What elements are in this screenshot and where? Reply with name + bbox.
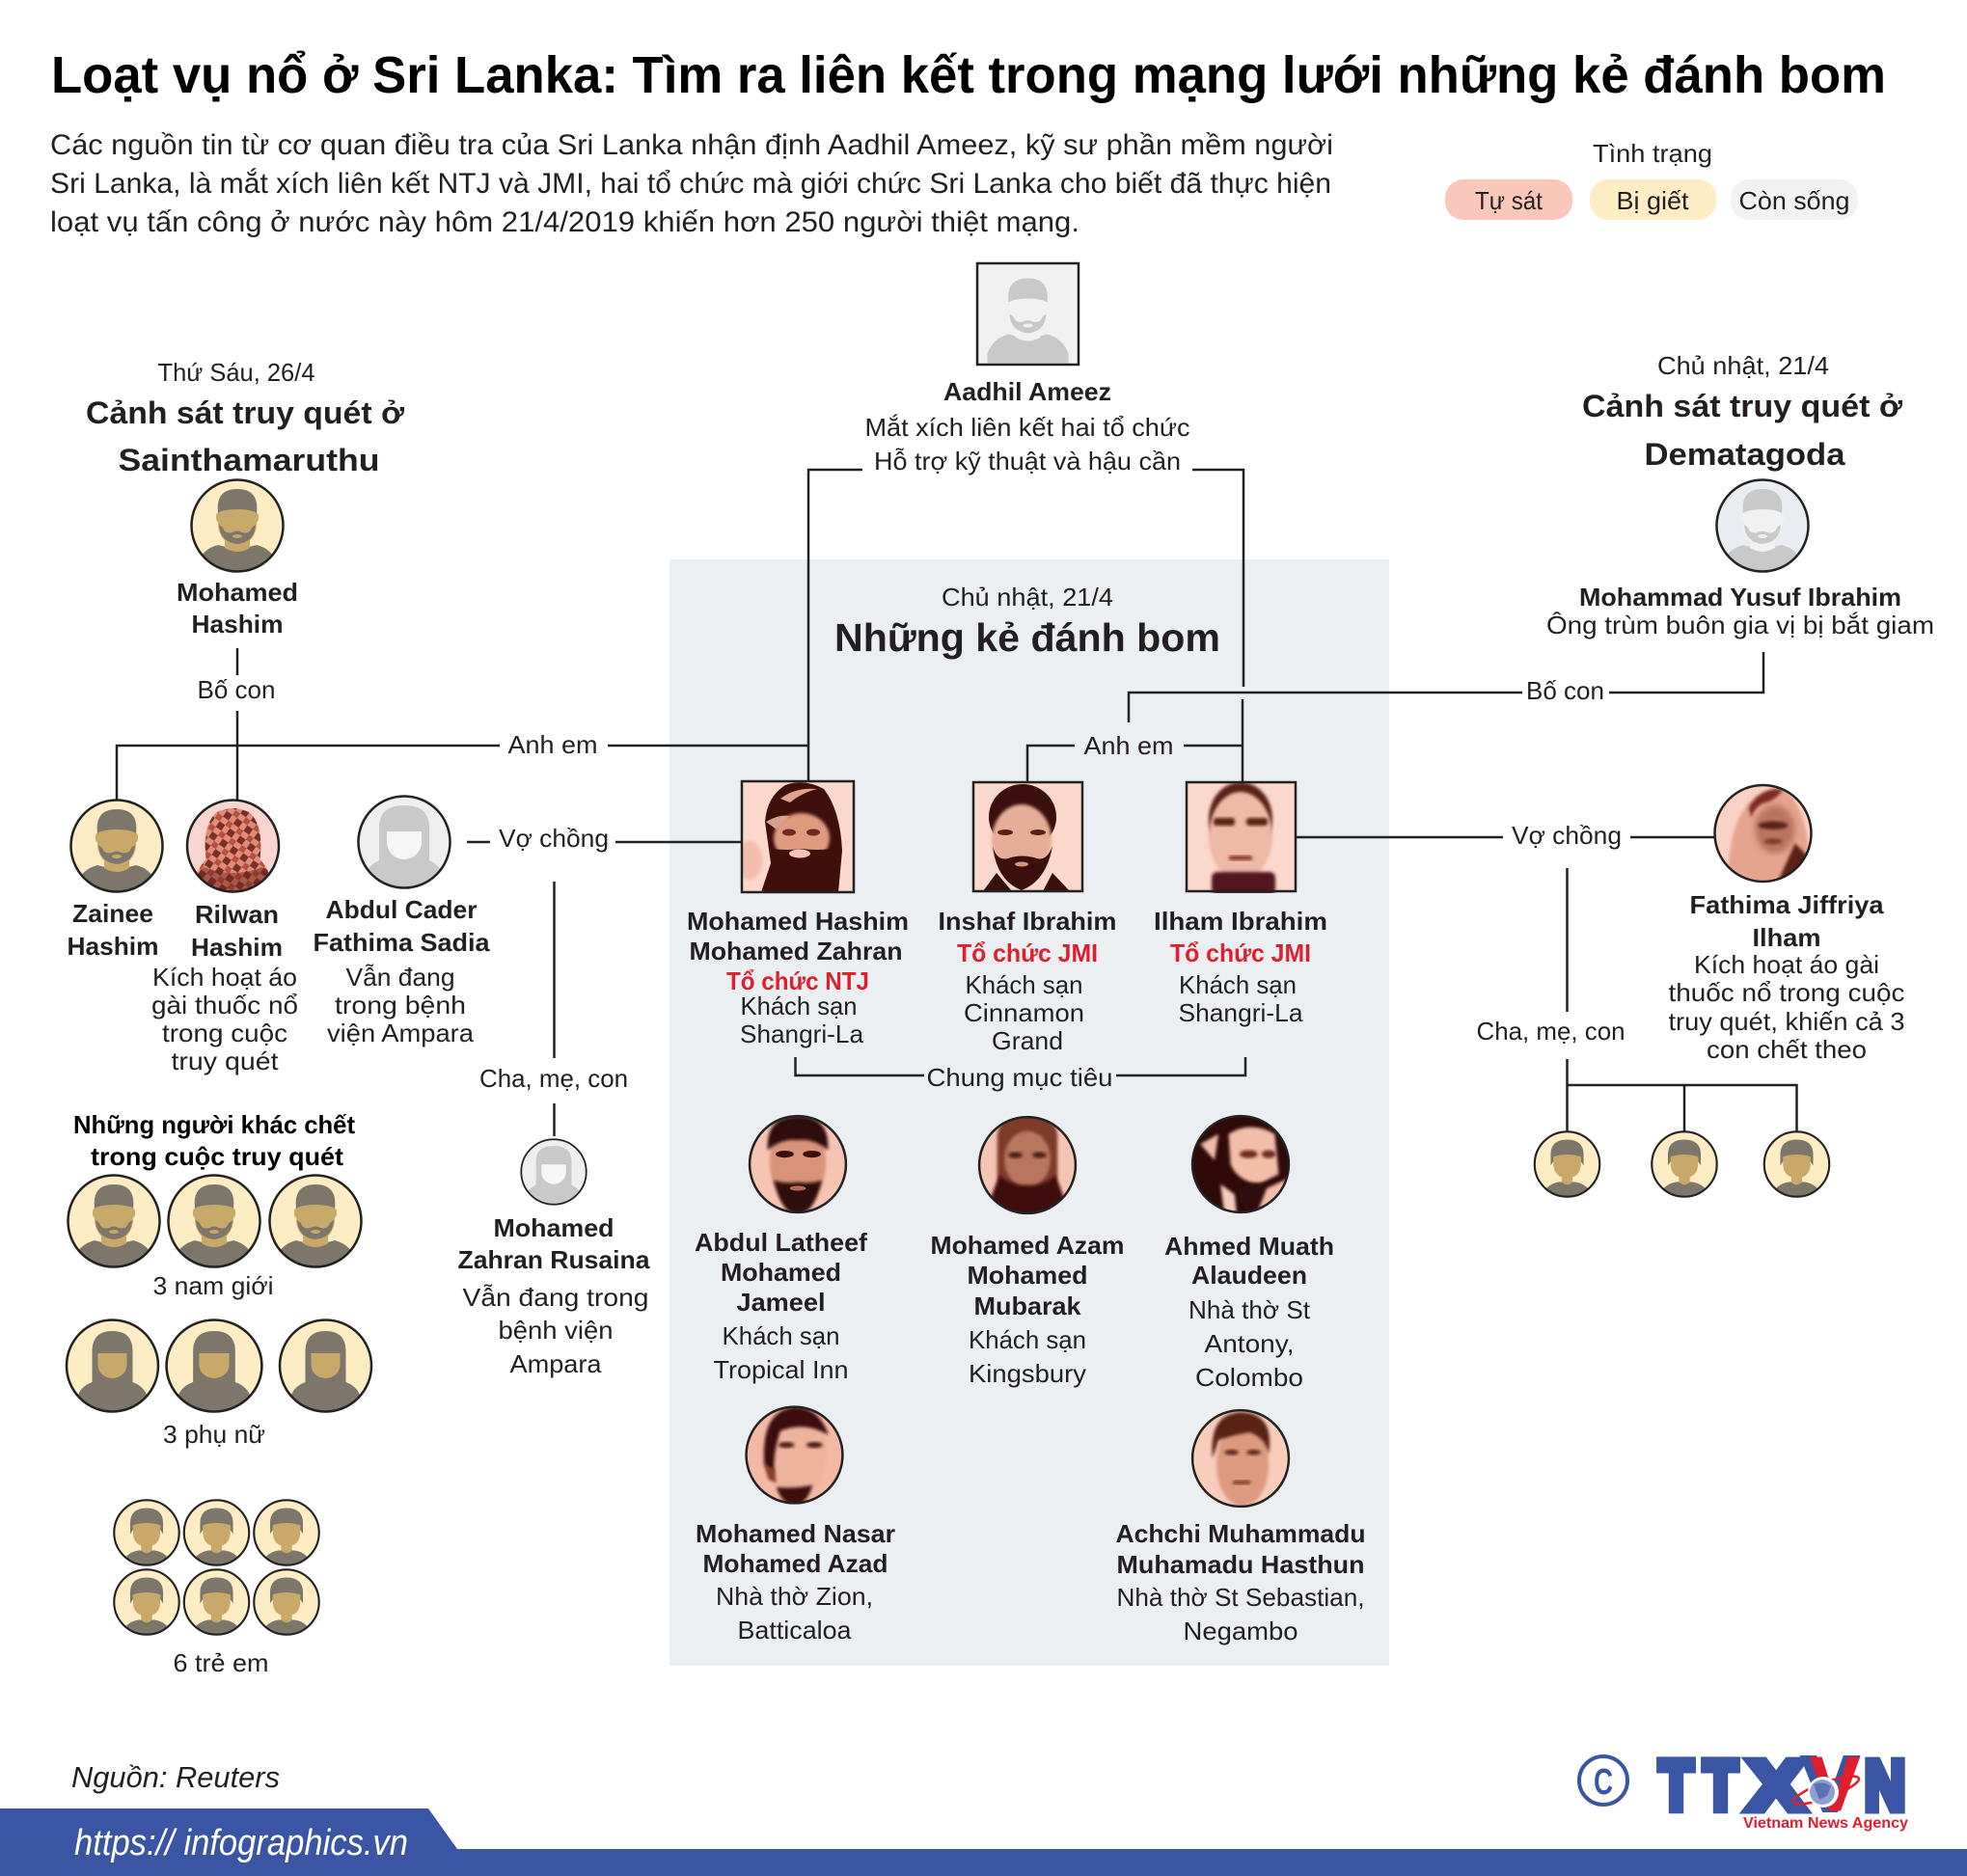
panel: bombers background (669, 559, 1389, 1666)
target: Grand (992, 1026, 1063, 1055)
portrait: scarf (187, 801, 279, 894)
intro text: Các nguồn tin từ cơ quan điều tra của Sri Lanka nhận định Aadhil Ameez, kỹ sư phần mềm người (50, 129, 1333, 161)
icon: man killed (191, 480, 284, 574)
name: Zainee (72, 899, 153, 928)
name (191, 900, 283, 962)
heading: Sainthamaruthu raid: Cảnh sát truy quét ở (86, 395, 404, 430)
target (969, 1325, 1086, 1388)
wordmark: X (1748, 1748, 1804, 1825)
photo (737, 781, 854, 892)
name (695, 1228, 867, 1317)
name (313, 895, 490, 957)
icon: girl alive (521, 1139, 587, 1206)
name: Inshaf Ibrahim (938, 907, 1117, 936)
heading: Sainthamaruthu raid: Thứ Sáu, 26/4 (158, 358, 314, 387)
target (964, 970, 1084, 1055)
intro text: loạt vụ tấn công ở nước này hôm 21/4/2019 khiến hơn 250 người thiệt mạng. (50, 206, 1079, 238)
wordmark (1659, 1741, 1905, 1827)
person: Rilwan Hashim (151, 801, 298, 1075)
person: Mohamed Zahran Rusaina (457, 1139, 650, 1378)
footer bar (0, 1808, 1967, 1876)
heading: Dematagoda raid: Dematagoda (1644, 437, 1845, 472)
name: Ilham (1752, 923, 1821, 952)
target: Cinnamon (964, 998, 1084, 1027)
description: Kích hoạt áo gài (1694, 950, 1879, 979)
description: truy quét (172, 1047, 279, 1075)
title: Loạt vụ nổ ở Sri Lanka: Tìm ra liên kết trong mạng lưới những kẻ đánh bom (51, 46, 1886, 104)
description: gài thuốc nổ (151, 991, 298, 1020)
target: Batticaloa (737, 1616, 852, 1645)
target (1117, 1583, 1364, 1645)
connector lines (117, 470, 1796, 1136)
panel: others killed in raid (67, 1110, 371, 1677)
wordmark: T (1704, 1748, 1737, 1825)
legend pill: alive: Còn sống (1738, 186, 1850, 215)
target: Negambo (1183, 1617, 1298, 1645)
name: Mohamed (177, 578, 298, 607)
description: Kích hoạt áo (152, 963, 297, 992)
intro text: Sri Lanka, là mắt xích liên kết NTJ và JMI, hai tổ chức mà giới chức Sri Lanka cho biết đã thực hiện (50, 168, 1331, 200)
wordmark: N (1865, 1748, 1905, 1825)
name: Mohamed Zahran (689, 937, 903, 965)
relation labels: Vợ chồng (499, 824, 609, 853)
icons: Fathima's 3 children (1535, 1131, 1829, 1198)
name: Fathima Jiffriya (1690, 890, 1884, 919)
name: Abdul Cader (326, 895, 477, 924)
legend pill: alive (1731, 179, 1858, 220)
name: Ilham Ibrahim (1154, 907, 1327, 936)
person: Ahmed Muath Alaudeen (1164, 1116, 1334, 1392)
name: Fathima Sadia (313, 928, 490, 957)
organisation: Tổ chức NTJ (726, 966, 869, 995)
description: thuốc nổ trong cuộc (1669, 978, 1904, 1007)
target (716, 1582, 873, 1645)
name: Mubarak (974, 1291, 1081, 1320)
legend pill: suicide: Tự sát (1475, 186, 1544, 215)
name and role: Aadhil Ameez (943, 377, 1111, 406)
description: Vẫn đang (345, 963, 455, 992)
heading: Sainthamaruthu raid (86, 358, 404, 477)
person: Mohamed Hashim (177, 480, 298, 639)
source: Nguồn: Reuters (71, 1760, 280, 1794)
heading: bombers: Chủ nhật, 21/4 (942, 583, 1113, 612)
photo (973, 782, 1082, 891)
name: Achchi Muhammadu (1115, 1519, 1366, 1548)
photo (747, 1407, 842, 1505)
icon: man killed (71, 801, 162, 894)
relation labels: Anh em (1084, 731, 1173, 760)
target: Nhà thờ Zion, (716, 1582, 873, 1611)
name and role: Ông trùm buôn gia vị bị bắt giam (1546, 611, 1934, 639)
icons: 3 women (67, 1319, 371, 1414)
name and role: Mắt xích liên kết hai tổ chức (864, 413, 1190, 442)
target (1179, 970, 1303, 1027)
footer url: https:// infographics.vn (74, 1823, 408, 1863)
heading: Những người khác chết (73, 1110, 355, 1139)
name: Hashim (68, 932, 158, 961)
person: Mohammad Yusuf Ibrahim (1546, 480, 1934, 639)
name (930, 1231, 1125, 1320)
person: Ilham Ibrahim (1154, 782, 1327, 1027)
heading: Dematagoda raid: Chủ nhật, 21/4 (1657, 351, 1829, 380)
name: Rilwan (195, 900, 279, 929)
name: Alaudeen (1191, 1261, 1307, 1290)
description (327, 963, 475, 1047)
name: Mohamed Azam (930, 1231, 1125, 1260)
copyright mark (1579, 1756, 1627, 1805)
organisation: Tổ chức JMI (1170, 938, 1311, 967)
photo (1192, 1410, 1289, 1507)
relation labels: Cha, mẹ, con (479, 1064, 628, 1093)
photo (1187, 782, 1296, 895)
person: Mohamed Hashim Mohamed Zahran (687, 781, 909, 1048)
photo (979, 1115, 1076, 1215)
description: trong cuộc (162, 1019, 287, 1047)
wordmark: T (1659, 1748, 1693, 1825)
name (177, 578, 298, 639)
name: Mohamed (721, 1258, 841, 1287)
person: Aadhil Ameez (864, 263, 1190, 476)
globe (1790, 1771, 1862, 1809)
person: Mohamed Azam Mohamed Mubarak (930, 1115, 1125, 1388)
icons: 6 children (114, 1500, 319, 1636)
target (714, 1321, 849, 1384)
name (457, 1213, 650, 1274)
name: Zahran Rusaina (457, 1245, 650, 1274)
wordmark: V (1802, 1741, 1858, 1827)
caption: 6 children: 6 trẻ em (174, 1648, 268, 1677)
photo (1192, 1116, 1289, 1214)
name: Hashim (191, 933, 283, 962)
photo (750, 1116, 846, 1214)
relation labels (197, 675, 1625, 1093)
name: Mohamed Hashim (687, 907, 909, 936)
description: Vẫn đang trong (463, 1283, 648, 1312)
legend pill: killed: Bị giết (1617, 186, 1689, 215)
relation labels: Chung mục tiêu (926, 1063, 1113, 1092)
name: Mohamed Nasar (696, 1519, 895, 1548)
name (1115, 1519, 1366, 1579)
copyright mark: C (1594, 1762, 1613, 1803)
name: Ahmed Muath (1164, 1232, 1334, 1261)
name and role (864, 377, 1190, 476)
target: Kingsbury (969, 1359, 1086, 1388)
target: Khách sạn (1179, 970, 1297, 999)
legend: status (1445, 139, 1858, 220)
name and role (1546, 583, 1934, 639)
target: Nhà thờ St (1188, 1295, 1311, 1324)
name (696, 1519, 895, 1578)
target (740, 992, 864, 1048)
description (1669, 950, 1904, 1064)
relation labels: Bố con (197, 675, 276, 704)
target: Shangri-La (1179, 998, 1303, 1027)
relation labels: Anh em (507, 730, 598, 759)
legend: status: Tình trạng (1593, 139, 1712, 168)
tagline: Vietnam News Agency (1743, 1815, 1908, 1832)
photo (1715, 785, 1812, 884)
name: Mohamed (967, 1261, 1088, 1290)
icons: 3 men (68, 1175, 361, 1269)
name and role: Mohammad Yusuf Ibrahim (1579, 583, 1901, 612)
target: Khách sạn (969, 1325, 1086, 1354)
portrait box (977, 263, 1079, 365)
caption: 3 men: 3 nam giới (152, 1271, 274, 1300)
intro text (50, 129, 1333, 238)
person: Mohamed Nasar Mohamed Azad (696, 1407, 895, 1645)
target: Khách sạn (965, 970, 1082, 999)
legend pill: suicide (1445, 179, 1572, 220)
name (1690, 890, 1884, 952)
heading: Dematagoda raid (1582, 351, 1902, 472)
target (1188, 1295, 1311, 1392)
icon: woman alive (359, 797, 450, 890)
heading: Sainthamaruthu raid: Sainthamaruthu (118, 443, 380, 477)
heading: bombers: Những kẻ đánh bom (834, 615, 1220, 660)
name: Muhamadu Hasthun (1117, 1550, 1364, 1579)
description (463, 1283, 648, 1378)
relation labels: Bố con (1526, 676, 1604, 705)
name (687, 907, 909, 965)
name: Abdul Latheef (695, 1228, 867, 1257)
legend pill: killed (1590, 179, 1716, 220)
person: Fathima Jiffriya Ilham (1669, 785, 1904, 1064)
name (1164, 1232, 1334, 1290)
person: Abdul Cader Fathima Sadia (313, 797, 490, 1047)
description: trong bệnh (335, 991, 466, 1020)
target: Shangri-La (740, 1020, 864, 1048)
heading: bombers (834, 583, 1220, 660)
heading: trong cuộc truy quét (91, 1142, 343, 1171)
relation labels: Cha, mẹ, con (1476, 1017, 1625, 1046)
relation labels: Vợ chồng (1512, 821, 1622, 850)
organisation: Tổ chức JMI (957, 938, 1098, 967)
name and role: Hỗ trợ kỹ thuật và hậu cần (874, 447, 1181, 476)
heading (73, 1110, 355, 1171)
description: viện Ampara (327, 1019, 475, 1047)
description: bệnh viện (498, 1316, 614, 1345)
target: Tropical Inn (714, 1355, 849, 1384)
name: Jameel (737, 1288, 826, 1317)
target: Colombo (1195, 1363, 1303, 1392)
description: con chết theo (1707, 1035, 1867, 1064)
target: Khách sạn (741, 992, 857, 1020)
description: Ampara (509, 1349, 602, 1378)
name: Mohamed (494, 1213, 614, 1242)
target: Nhà thờ St Sebastian, (1117, 1583, 1364, 1612)
target: Khách sạn (722, 1321, 839, 1350)
name: Hashim (191, 610, 284, 639)
person: Abdul Latheef Mohamed Jameel (695, 1116, 867, 1384)
target: Antony, (1204, 1329, 1295, 1358)
wordmark: V (1810, 1741, 1860, 1827)
name (68, 899, 158, 961)
person: Zainee Hashim (68, 801, 162, 961)
icon: man alive (1717, 480, 1808, 574)
name: Mohamed Azad (702, 1549, 888, 1578)
description: truy quét, khiến cả 3 (1669, 1007, 1904, 1036)
heading: Dematagoda raid: Cảnh sát truy quét ở (1582, 389, 1902, 423)
logo: TTXVN (1579, 1741, 1908, 1832)
person: Inshaf Ibrahim (938, 782, 1117, 1055)
person: Achchi Muhammadu Muhamadu Hasthun (1115, 1410, 1366, 1645)
description (151, 963, 298, 1075)
caption: 3 women: 3 phụ nữ (163, 1420, 265, 1449)
